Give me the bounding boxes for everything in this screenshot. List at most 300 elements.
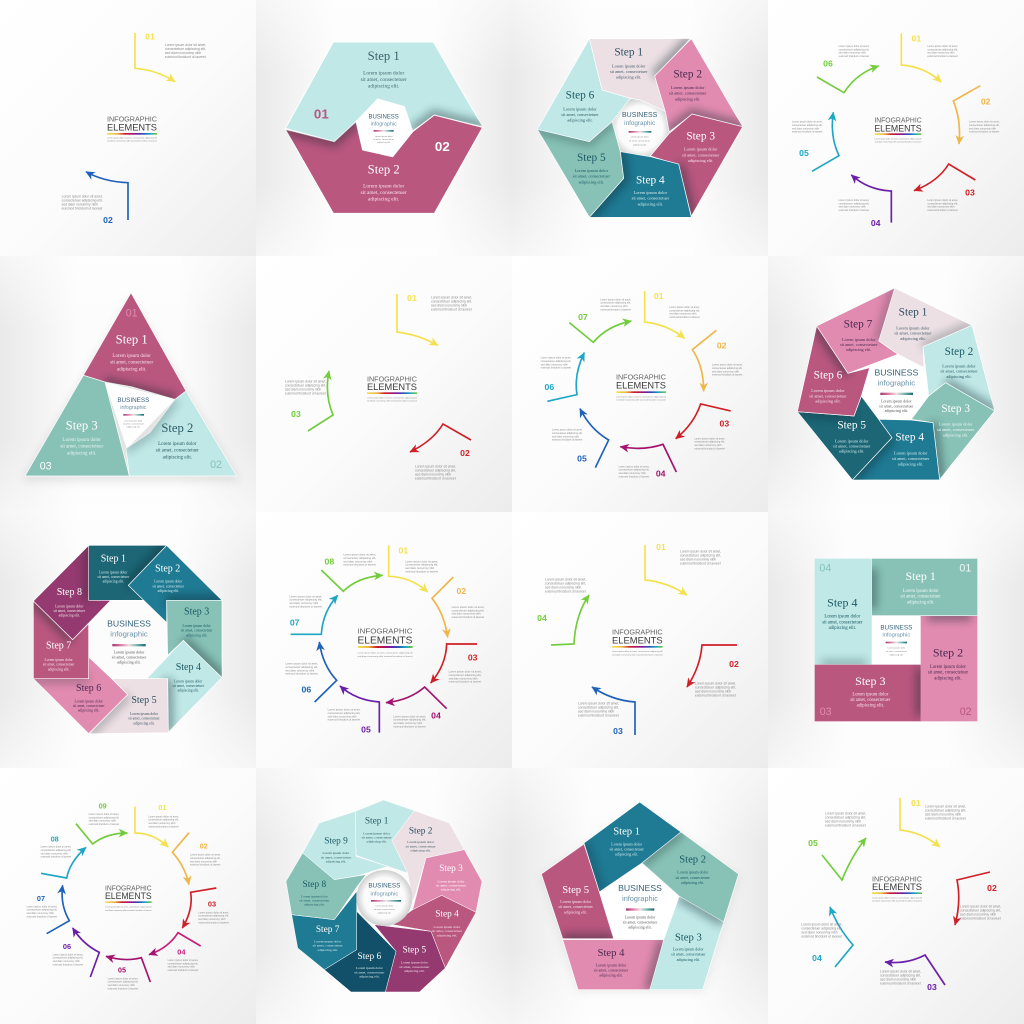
step 1 panel: Lorem ipsum dolor [896,325,930,330]
arrow 09: consectetuer adipiscing elit, [89,816,119,819]
arrow 06: Lorem ipsum dolor sit amet, [285,662,318,666]
step 1 panel: sit amet, consectetuer [98,575,130,580]
arrow 08: consectetuer adipiscing elit, [343,556,376,560]
arrow 06: 06 [63,942,71,951]
arrow 04: 04 [871,218,881,228]
arrow 02: euismod tincidunt ut laoreet [190,864,221,867]
center title [357,628,413,658]
arrow 02: consectetuer adipiscing elit, [190,857,221,860]
step 5 panel: Step 5 [131,695,157,706]
step 1 panel [879,288,972,368]
step 5 panel: Lorem ipsum dolor [560,899,592,904]
center hub text: sit amet, consectetuer [629,140,650,143]
center hub [356,99,412,157]
step 2 panel: Step 2 [409,826,433,836]
step 6 panel: adipiscing elit. [815,399,841,404]
center title: INFOGRAPHIC [612,630,663,637]
step 2 panel [128,545,222,623]
step 3 panel [650,114,743,216]
step 7 panel: Lorem ipsum dolor [842,337,876,342]
step 3 panel: Step 3 [686,131,715,143]
step 5 panel: Lorem ipsum dolor [401,961,429,965]
arrow 07: 07 [578,312,588,322]
step 5 panel: sit amet, consectetuer [128,717,161,722]
panel: six-step arrow cycle [768,0,1024,256]
step 3 panel [650,896,724,990]
arrow 06: Lorem ipsum dolor sit amet, [839,45,870,48]
arrow 03: sed diam nonummy nibh [880,978,916,982]
arrow 01 [645,542,721,595]
step 3 panel: Lorem ipsum dolor [62,438,101,443]
center hub: Lorem ipsum dolor [375,904,394,907]
arrow 05: sed diam nonummy nibh [328,714,357,718]
step 5 panel: Step 5 [837,420,866,432]
arrow 02 [955,872,1001,925]
arrow 04: sed diam nonummy nibh [393,721,423,725]
arrow 04: consectetuer adipiscing elit, [619,469,649,472]
step 2 panel [392,811,464,901]
arrow 02: 02 [457,586,466,596]
arrow 05 [792,112,839,171]
step 3 panel: Lorem ipsum dolor [852,692,889,697]
arrow 05: 05 [118,966,126,975]
center hub text: BUSINESS [622,112,658,119]
center hub text: infographic [110,629,148,638]
arrow 03: consectetuer adipiscing elit, [198,915,229,918]
arrow 01: euismod tincidunt ut laoreet [165,55,206,59]
center hub text: adipiscing elit. [117,660,141,665]
center hub: adipiscing elit. [377,141,391,144]
panel: seven-step arrow cycle [512,256,768,512]
center hub text: infographic [624,120,655,127]
arrow 02 [687,645,739,698]
step 7 panel: Lorem ipsum dolor [45,658,74,662]
arrow 04: 04 [537,613,547,623]
arrow 04: consectetuer adipiscing elit, [168,962,198,965]
center hub text: Lorem ipsum dolor [631,136,649,139]
arrow 03: consectetuer adipiscing elit, [578,706,619,710]
arrow 07: Lorem ipsum dolor sit amet, [600,298,631,301]
step 5 panel [89,679,168,734]
arrow 03: euismod tincidunt ut laoreet [578,714,619,718]
center hub text: sit amet, consectetuer [879,403,914,409]
arrow 03 [880,955,945,992]
step 5 panel: sit amet, consectetuer [833,444,871,450]
arrow 06: euismod tincidunt ut laoreet [285,672,318,676]
arrow 04 [537,578,589,645]
step 2 panel: Lorem ipsum dolor [154,580,183,584]
step 6 panel: sit amet, consectetuer [809,393,847,399]
arrow 06: sed diam nonummy nibh [53,960,80,963]
step 2 panel: sit amet, consectetuer [153,584,185,589]
arrow 01: sed diam nonummy nibh [405,566,435,570]
center title [616,375,666,402]
arrow 07: 07 [290,618,300,628]
center hub backdrop [861,341,929,420]
center hub backdrop [872,616,921,665]
arrow 05: consectetuer adipiscing elit, [825,816,866,820]
center hub text: BUSINESS [117,397,149,404]
step 1 panel: adipiscing elit. [900,336,926,341]
step 4 panel: Lorem ipsum dolor [894,451,928,456]
step 2 panel [921,616,977,721]
step 2 panel: 02 [960,706,972,718]
center title: sed diam nonummy nibh euismod tincidunt ut laoreet [367,399,417,402]
arrow 03: sed diam nonummy nibh [694,444,722,447]
step 3 panel: Lorem ipsum dolor [183,624,212,628]
arrow 02: euismod tincidunt ut laoreet [695,694,736,698]
step 6 panel: adipiscing elit. [567,118,593,123]
arrow 05: 05 [808,838,818,848]
arrow 08: euismod tincidunt ut laoreet [343,563,376,567]
arrow 05: consectetuer adipiscing elit, [328,711,361,715]
center hub text: BUSINESS [880,625,912,632]
center title: sed diam nonummy nibh euismod tincidunt ut laoreet [616,399,666,402]
step 3 panel: Step 3 [675,933,702,944]
arrow 03: 03 [613,726,623,736]
panel: four-step arrow cycle [512,512,768,768]
arrow 07: euismod tincidunt ut laoreet [600,308,631,311]
center title [874,118,922,143]
arrow 05: Lorem ipsum dolor sit amet, [108,977,139,980]
arrow 03: 03 [291,409,301,419]
step 1 panel: sit amet, consectetuer [361,77,407,83]
center title: INFOGRAPHIC [367,376,417,383]
center title [872,876,922,903]
step 2 panel: Step 2 [368,163,400,177]
panel: triangle three steps [0,256,256,512]
arrow 01: sed diam nonummy nibh [927,52,955,55]
step 1 panel: adipiscing elit. [103,580,124,584]
step 2 panel [655,39,743,132]
arrow 04 [839,175,891,228]
arrow 02: consectetuer adipiscing elit, [695,686,736,690]
center title: INFOGRAPHIC [107,116,157,123]
arrow 07 [569,298,631,342]
step 6 panel: Lorem ipsum dolor [356,966,384,970]
step 3 panel: adipiscing elit. [943,432,968,437]
step 1 panel: adipiscing elit. [117,367,146,372]
arrow 03: sed diam nonummy nibh [449,676,478,680]
step 9 panel: adipiscing elit. [326,860,346,864]
center title: Lorem ipsum dolor sit amet, consectetuer adipiscing elit [612,650,663,653]
step 2 panel: Step 2 [679,855,706,866]
center title: ELEMENTS [357,635,412,646]
arrow 02: euismod tincidunt ut laoreet [62,207,102,211]
arrow 05 [106,956,150,990]
step 1 panel [285,42,483,142]
arrow 08: consectetuer adipiscing elit, [41,849,71,852]
step 5 panel: adipiscing elit. [404,969,425,973]
step 6 panel [33,657,128,734]
step 9 panel: Lorem ipsum dolor [323,851,350,855]
arrow 04: 04 [812,953,822,963]
step 1 panel: Lorem ipsum dolor [363,70,404,76]
step 2 panel: sit amet, consectetuer [406,844,437,849]
arrow 05 [808,812,866,880]
step 2 panel: Lorem ipsum dolor [930,665,966,670]
arrow 01: consectetuer adipiscing elit, [669,309,700,312]
arrow 03: Lorem ipsum dolor sit amet, [880,970,921,974]
arrow 03: euismod tincidunt ut laoreet [694,447,725,450]
arrow 05 [328,686,379,734]
step 1 panel [83,293,186,399]
arrow 08: Lorem ipsum dolor sit amet, [343,553,376,557]
arrow 03: Lorem ipsum dolor sit amet, [927,199,958,202]
arrow 03 [182,888,229,928]
center title: ELEMENTS [874,123,922,133]
arrow 07: euismod tincidunt ut laoreet [27,915,57,918]
step 2 panel: Lorem ipsum dolor [363,183,404,189]
step 1 panel: Step 1 [368,49,400,63]
step 4 panel: adipiscing elit. [178,688,199,692]
arrow 04 [801,907,853,967]
step 2 panel: Step 2 [945,346,974,358]
center hub: infographic [371,121,397,127]
center title: INFOGRAPHIC [357,628,412,635]
arrow 02: sed diam nonummy nibh [960,913,996,917]
arrow 04: euismod tincidunt ut laoreet [393,724,426,728]
step 4 panel: sit amet, consectetuer [632,196,670,202]
step 2 panel: adipiscing elit. [158,589,179,593]
arrow 08: 08 [325,556,334,566]
arrow 05: 05 [799,148,809,158]
step 5 panel: Step 5 [562,885,589,896]
step 3 panel: sit amet, consectetuer [436,883,467,888]
arrow 02: Lorem ipsum dolor sit amet, [62,195,103,199]
step 4 panel: Step 4 [435,909,459,919]
step 1 panel: adipiscing elit. [615,851,638,856]
step 5 panel: sit amet, consectetuer [399,965,430,970]
arrow 01: euismod tincidunt ut laoreet [680,562,721,566]
step 3 panel: Lorem ipsum dolor [673,946,704,951]
arrow 05 [552,409,609,468]
step 2 panel: Lorem ipsum dolor [671,85,705,90]
arrow 04: sed diam nonummy nibh [545,586,581,590]
step 4 panel: adipiscing elit. [599,973,623,978]
arrow 01: 01 [911,798,921,808]
step 2 panel: Lorem ipsum dolor [158,442,197,447]
arrow 03: sed diam nonummy nibh [927,206,955,209]
step 6 panel: Step 6 [358,952,381,962]
arrow 02: consectetuer adipiscing elit, [415,469,456,473]
step 4 panel: Step 4 [827,596,857,610]
arrow 01: Lorem ipsum dolor sit amet, [148,815,179,818]
step 1 panel: adipiscing elit. [616,75,641,80]
arrow 01: 01 [407,293,417,303]
step 8 panel: Step 8 [57,587,82,598]
step 2 panel: 02 [435,139,450,154]
arrow 04: 04 [431,710,441,720]
arrow 02: sed diam nonummy nibh [452,612,481,616]
arrow 09: euismod tincidunt ut laoreet [89,823,119,826]
arrow 04 [149,933,201,972]
arrow 04: sed diam nonummy nibh [168,966,195,969]
center title: sed diam nonummy nibh euismod tincidunt ut laoreet [872,900,922,903]
step 2 panel: sit amet, consectetuer [675,875,711,881]
step 1 panel [589,39,690,112]
arrow 02 [432,577,485,637]
arrow 02: 02 [717,340,727,350]
arrow 06: consectetuer adipiscing elit, [285,665,318,669]
panel: eight-step arrow cycle [256,512,512,768]
step 7 panel: Lorem ipsum dolor [314,939,342,943]
center title: ELEMENTS [107,122,157,132]
arrow 01: Lorem ipsum dolor sit amet, [927,45,958,48]
arrow 02: euismod tincidunt ut laoreet [712,374,743,377]
step 8 panel: adipiscing elit. [304,903,325,907]
panel: nonagon nine steps [256,768,512,1024]
arrow 04: Lorem ipsum dolor sit amet, [168,959,199,962]
step 1 panel: Step 1 [614,46,643,58]
arrow 04: Lorem ipsum dolor sit amet, [619,465,650,468]
step 1 panel: sit amet, consectetuer [362,835,393,840]
arrow 04: 04 [656,469,666,479]
step 4 panel: Lorem ipsum dolor [174,680,203,684]
step 9 panel: sit amet, consectetuer [321,855,352,860]
center title: sed diam nonummy nibh euismod tincidunt ut laoreet [107,140,157,143]
arrow 05: consectetuer adipiscing elit, [552,432,583,435]
step 6 panel: adipiscing elit. [359,975,380,979]
step 9 panel: Step 9 [324,836,348,846]
center hub text: BUSINESS [874,368,918,378]
arrow 03 [914,164,975,212]
center hub text [107,618,151,665]
step 1 panel [89,545,167,600]
step 3 panel: 03 [40,461,52,473]
arrow 06: consectetuer adipiscing elit, [541,360,571,363]
arrow 02: consectetuer adipiscing elit, [62,199,103,203]
arrow 01: euismod tincidunt ut laoreet [927,55,958,58]
step 3 panel: adipiscing elit. [67,451,96,456]
center title: Lorem ipsum dolor sit amet, consectetuer adipiscing elit [105,906,152,909]
panel: two-step arrow cycle [0,0,256,256]
step 4 panel: Lorem ipsum dolor [434,925,461,929]
arrow 08: euismod tincidunt ut laoreet [41,856,71,859]
arrow 03 [431,644,482,684]
step 1 panel [872,559,977,615]
panel: hexagon two steps [256,0,512,256]
step 2 panel: sit amet, consectetuer [669,91,707,97]
arrow 01: sed diam nonummy nibh [669,313,697,316]
step 3 panel: sit amet, consectetuer [850,698,891,703]
step 1 panel: Lorem ipsum dolor [612,63,646,68]
arrow 01: 01 [912,34,921,44]
center title: Lorem ipsum dolor sit amet, consectetuer adipiscing elit [875,137,922,140]
arrow 03: Lorem ipsum dolor sit amet, [198,911,229,914]
center hub: Lorem ipsum dolor [375,135,393,138]
step 2 panel [642,832,739,922]
arrow 04: Lorem ipsum dolor sit amet, [801,923,842,927]
arrow 01: consectetuer adipiscing elit, [405,563,438,567]
step 3 panel: Step 3 [855,674,885,688]
arrow 05: euismod tincidunt ut laoreet [552,439,583,442]
arrow 03: 03 [208,900,216,909]
step 3 panel: adipiscing elit. [688,158,713,163]
step 5 panel [797,396,892,480]
step 6 panel: adipiscing elit. [78,708,100,712]
arrow 02: sed diam nonummy nibh [415,473,451,477]
arrow 04: consectetuer adipiscing elit, [393,718,426,722]
arrow 05: Lorem ipsum dolor sit amet, [328,708,361,712]
arrow 04: Lorem ipsum dolor sit amet, [393,714,426,718]
arrow 04: euismod tincidunt ut laoreet [545,590,586,594]
arrow 04: euismod tincidunt ut laoreet [168,969,198,972]
step 1 panel: sit amet, consectetuer [110,361,154,366]
step 7 panel: Step 7 [316,925,340,935]
arrow 03: consectetuer adipiscing elit, [694,441,725,444]
step 5 panel: Lorem ipsum dolor [130,712,159,716]
arrow 07: Lorem ipsum dolor sit amet, [289,594,322,598]
triangle drop shadow [22,298,240,481]
center hub text: adipiscing elit. [127,425,141,428]
arrow 04: consectetuer adipiscing elit, [839,202,869,205]
center hub text: adipiscing elit. [633,144,647,147]
arrow 08: sed diam nonummy nibh [343,559,373,563]
center title: INFOGRAPHIC [616,375,666,382]
center hub: BUSINESS [368,883,400,890]
step 4 panel: sit amet, consectetuer [432,929,463,934]
step 4 panel: Lorem ipsum dolor [596,963,627,968]
arrow 07: consectetuer adipiscing elit, [289,598,322,602]
center hub text: sit amet, consectetuer [886,650,907,653]
arrow 04: 04 [177,947,186,956]
arrow 05: Lorem ipsum dolor sit amet, [792,121,823,124]
arrow 04: sed diam nonummy nibh [839,206,866,209]
step 4 panel: adipiscing elit. [638,201,663,206]
arrow 03: consectetuer adipiscing elit, [927,202,958,205]
arrow 01: 01 [399,545,408,555]
step 5 panel: adipiscing elit. [839,449,864,454]
step 1 panel: 01 [314,106,329,121]
step 2 panel: sit amet, consectetuer [361,190,407,196]
arrow 02: 02 [103,215,113,225]
arrow 05: 05 [577,454,587,464]
center title [105,885,152,912]
step 3 panel [167,600,222,678]
step 1 panel: Lorem ipsum dolor [903,589,939,594]
step 3 panel: sit amet, consectetuer [181,629,213,634]
center hub text: sit amet, consectetuer [623,919,658,925]
arrow 06 [53,928,99,977]
arrow 01 [135,32,206,82]
step 3 panel: Lorem ipsum dolor [438,879,465,883]
step 1 panel: Step 1 [899,307,927,319]
step 8 panel [286,853,366,920]
step 1 panel: Lorem ipsum dolor [363,831,391,835]
center title: INFOGRAPHIC [874,118,922,125]
center title [612,630,663,656]
arrow 06: 06 [302,685,311,695]
step 8 panel [33,545,111,640]
center hub text: infographic [882,633,910,639]
step 3 panel: sit amet, consectetuer [937,427,975,433]
arrow 07: consectetuer adipiscing elit, [600,302,631,305]
arrow 02: sed diam nonummy nibh [62,203,98,207]
step 1 panel: Step 1 [365,816,389,826]
arrow 03 [578,687,635,736]
arrow 02: sed diam nonummy nibh [695,690,731,694]
pentagon drop shadow [540,806,740,992]
center title: Lorem ipsum dolor sit amet, consectetuer adipiscing elit [357,651,413,654]
step 1 panel: 01 [126,307,138,319]
arrow 03 [676,404,731,450]
center hub text: infographic [622,894,658,903]
step 6 panel: Lorem ipsum dolor [75,700,104,704]
step 3 panel: adipiscing elit. [186,633,208,637]
arrow 04 [386,687,447,728]
step 3 panel: Step 3 [66,418,98,432]
